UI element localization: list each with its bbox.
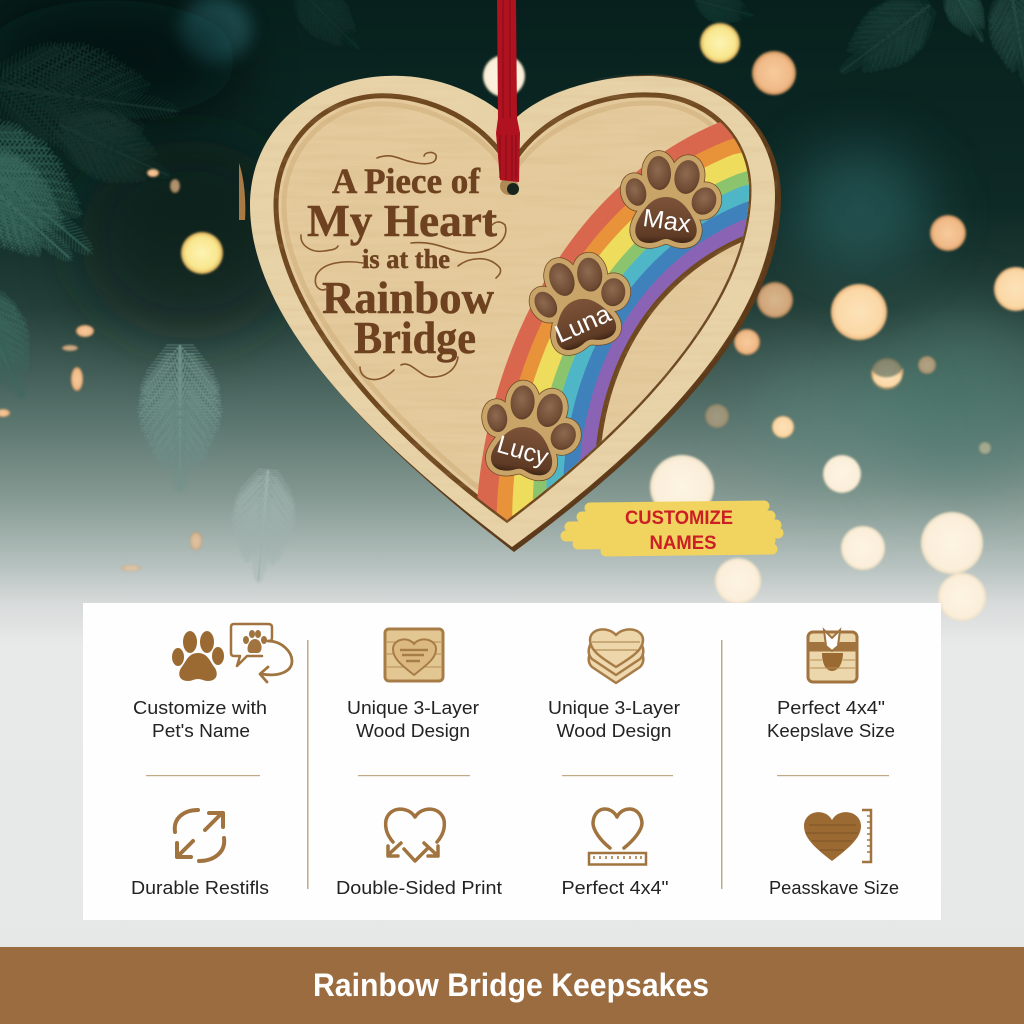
- engraved quote: is at the: [362, 244, 450, 274]
- inner bevel: [284, 103, 741, 510]
- feature: unique 3-layer wood design: [347, 629, 479, 741]
- feature: customize with pet's name: Pet's Name: [152, 720, 250, 741]
- feature: perfect 4x4 keepsake size: [767, 630, 895, 741]
- feature: customize with pet's name: [133, 624, 292, 741]
- feature: double-sided print: Double-Sided Print: [336, 877, 502, 898]
- paw: Max: Max: [641, 204, 693, 238]
- paw: Max: [623, 155, 721, 243]
- customize names badge: NAMES: [650, 533, 716, 554]
- feature: double-sided print: [336, 809, 502, 898]
- feature: perfect 4x4: [562, 809, 668, 898]
- icon: paw and speech bubble: [172, 624, 292, 682]
- icon: stacked hearts: [589, 629, 643, 683]
- feature: unique 3-layer wood design (stacked): [548, 629, 680, 741]
- feature: unique 3-layer wood design: Wood Design: [356, 720, 470, 741]
- customize names badge: [566, 506, 778, 554]
- wood grain: [274, 73, 778, 522]
- text: Customize with: [133, 697, 267, 718]
- wood grain on lower-right floor: [600, 250, 724, 441]
- engraved quote: [301, 152, 506, 380]
- engraved quote: My Heart: [307, 195, 498, 246]
- icon: keepsake box: [808, 630, 857, 682]
- features panel: [83, 603, 941, 920]
- icon: wood square with heart: [385, 629, 443, 681]
- feature: unique 3-layer wood design: Unique 3-Layer: [347, 697, 479, 718]
- feature: perfect 4x4 keepsake size: Keepslave Size: [767, 720, 895, 741]
- paw: Lucy: Lucy: [494, 430, 552, 472]
- engraved quote: A Piece of: [332, 161, 481, 201]
- feature: durable: [131, 810, 269, 898]
- paw: Luna: [522, 244, 642, 357]
- icon: heart on ruler: [589, 809, 646, 864]
- feature: peasskave size: Peasskave Size: [769, 877, 899, 898]
- brush strokes: [566, 506, 778, 551]
- icon: heart with arrows: [386, 809, 444, 861]
- ornament dark edge: [252, 75, 781, 552]
- feature: perfect 4x4: Perfect 4x4": [562, 877, 668, 898]
- wood sliver behind ornament: [239, 163, 245, 220]
- icon: wood heart with ruler: [804, 810, 871, 862]
- feature: perfect 4x4 keepsake size: Perfect 4x4": [777, 697, 885, 718]
- icon: expanding arrows: [175, 810, 224, 861]
- customize names badge: CUSTOMIZE: [625, 508, 733, 529]
- rainbow: [478, 122, 749, 520]
- hanging hole: [500, 177, 519, 195]
- footer band: Rainbow Bridge Keepsakes: [313, 967, 709, 1003]
- pine branches: [0, 0, 1024, 587]
- paw: Lucy: [477, 380, 586, 480]
- engraved quote: Rainbow: [322, 273, 494, 323]
- heart ornament: [250, 0, 800, 620]
- engraved quote: Bridge: [354, 313, 476, 363]
- feature: unique 3-layer wood design (stacked): Unique 3-Layer: [548, 697, 680, 718]
- feature: unique 3-layer wood design (stacked): Wood Design: [556, 720, 672, 741]
- recessed floor: [276, 95, 749, 520]
- bokeh lights: [0, 23, 1024, 621]
- paw: Luna: Luna: [551, 300, 615, 349]
- feature: durable: Durable Restifls: [131, 877, 269, 898]
- wood rim: [250, 76, 775, 547]
- red ribbon: [496, 0, 520, 182]
- footer band: [0, 947, 1024, 1024]
- engraved flourishes: [301, 152, 506, 380]
- feature: peasskave size: [769, 810, 899, 898]
